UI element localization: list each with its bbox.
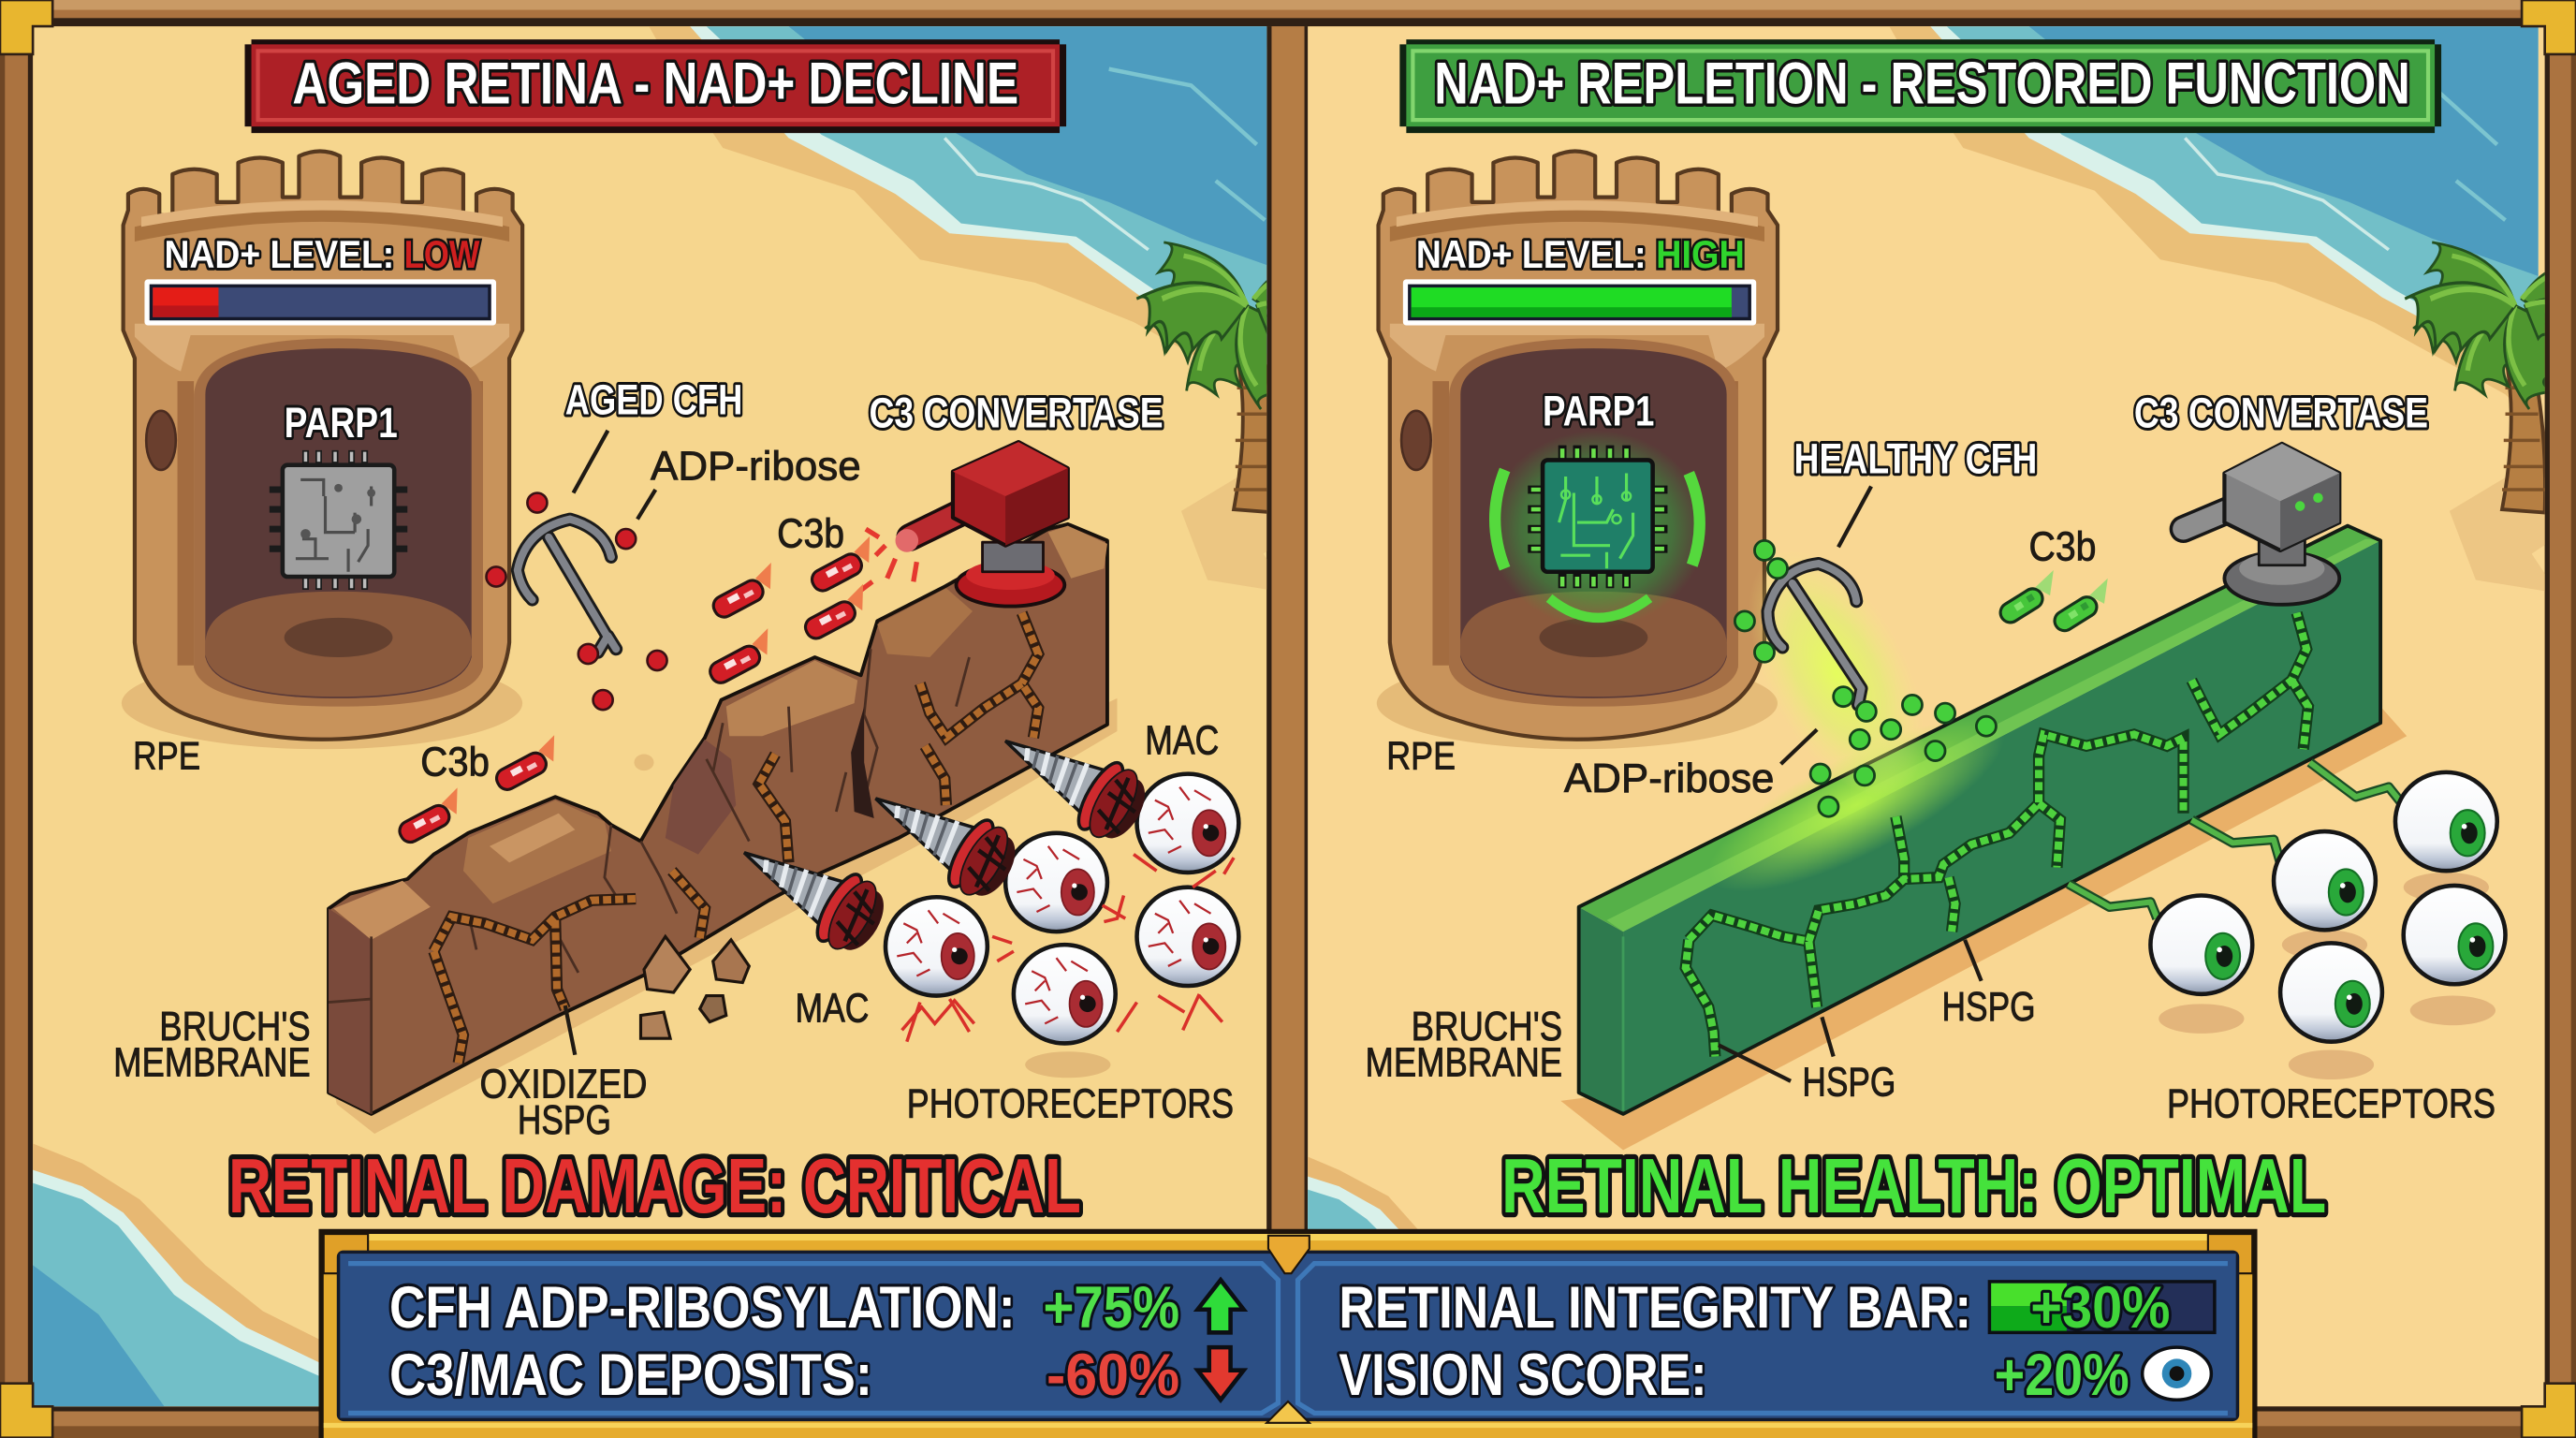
label: aged CFH: AGED CFH xyxy=(565,375,742,423)
value: +30%: +30% xyxy=(2030,1275,2170,1341)
gauge value low: LOW xyxy=(404,232,480,276)
value: +20%: +20% xyxy=(1995,1343,2130,1408)
tower: RPE xyxy=(122,151,522,749)
label: HSPG upper: HSPG xyxy=(1942,984,2036,1030)
stat: retinal integrity bar: RETINAL INTEGRITY BAR: xyxy=(1339,1275,1971,1341)
label: healthy CFH: HEALTHY CFH xyxy=(1794,434,2037,482)
stat: C3/MAC deposits: C3/MAC DEPOSITS: xyxy=(389,1343,872,1408)
label: C3b lower: C3b xyxy=(420,739,490,785)
label: C3 convertase: C3 CONVERTASE xyxy=(869,389,1164,436)
gauge label: NAD+ LEVEL: xyxy=(1416,232,1647,276)
title banner: NAD+ repletion xyxy=(1399,39,2441,133)
panel: NAD+ repletion xyxy=(1308,26,2576,1406)
healthy Bruch's membrane wall xyxy=(1560,526,2407,1151)
tower: RPE right xyxy=(1377,151,1778,749)
C3b projectiles xyxy=(393,536,883,845)
label: MAC right: MAC xyxy=(1145,718,1219,764)
banner text: AGED RETINA - NAD+ DECLINE xyxy=(292,51,1018,117)
status: retinal health: RETINAL HEALTH: OPTIMAL xyxy=(1501,1143,2326,1229)
stat: vision score: VISION SCORE: xyxy=(1339,1343,1707,1408)
label: C3b: C3b xyxy=(2029,523,2097,569)
label: RPE: RPE xyxy=(133,733,200,777)
connecting vines to photoreceptors xyxy=(2069,762,2402,918)
value: -60%: -60% xyxy=(1046,1343,1179,1408)
label: RPE: RPE xyxy=(1386,733,1456,777)
label: photoreceptors: PHOTORECEPTORS xyxy=(907,1080,1234,1126)
beach background right xyxy=(1308,26,2576,1406)
icon: grey PARP1 chip xyxy=(270,450,407,590)
healthy photoreceptors xyxy=(2150,772,2506,1079)
grey C3 convertase turret xyxy=(2184,444,2339,605)
HSPG vines xyxy=(1686,613,2308,1056)
label: C3 convertase: C3 CONVERTASE xyxy=(2134,389,2428,436)
value: +75%: +75% xyxy=(1043,1275,1179,1341)
icon: healthy CFH hook xyxy=(1767,564,1862,705)
icon: eye xyxy=(2143,1347,2211,1400)
center ornament bottom xyxy=(1266,1401,1310,1423)
status: retinal damage: RETINAL DAMAGE: CRITICAL xyxy=(228,1143,1081,1229)
PARP1 label: PARP1 xyxy=(1543,388,1654,435)
beach background left xyxy=(33,26,1369,1406)
gauge value high: HIGH xyxy=(1656,232,1745,276)
ADP-ribose green dots xyxy=(1734,540,1996,816)
stat: CFH ADP-ribosylation: CFH ADP-RIBOSYLATION: xyxy=(389,1275,1016,1341)
rubble rocks xyxy=(640,936,749,1038)
title banner: aged retina xyxy=(245,39,1066,133)
leaders: HSPG lower xyxy=(1719,1017,1834,1081)
CFH glow xyxy=(1713,522,1961,825)
stats HUD xyxy=(318,1229,2258,1438)
panel: aged retina xyxy=(33,26,1369,1406)
center ornament top xyxy=(1268,1236,1310,1273)
label: ADP-ribose: ADP-ribose xyxy=(1564,756,1775,801)
icon: aged CFH grappling hook xyxy=(518,520,616,653)
NAD+ level gauge low xyxy=(144,232,496,325)
C3b projectiles green xyxy=(1995,570,2120,635)
PARP1 label: PARP1 xyxy=(285,399,398,447)
label: oxidized HSPG: OXIDIZED xyxy=(479,1061,648,1107)
leader: ADP-ribose xyxy=(1781,729,1817,764)
gauge label: NAD+ LEVEL: xyxy=(165,232,394,276)
label: Bruch's membrane: MEMBRANE xyxy=(113,1040,311,1086)
ADP-ribose dots xyxy=(487,493,667,710)
label: Bruch's membrane: MEMBRANE xyxy=(1365,1040,1562,1086)
label: Bruch's membrane: BRUCH'S xyxy=(159,1004,311,1049)
label: oxidized HSPG: HSPG xyxy=(518,1097,611,1143)
label: Bruch's membrane: BRUCH'S xyxy=(1412,1004,1562,1049)
icon: glowing PARP1 chip xyxy=(1495,446,1700,618)
label: C3b upper: C3b xyxy=(777,510,844,556)
muzzle sparks xyxy=(859,529,916,592)
leader: healthy CFH xyxy=(1838,486,1871,547)
gauge bar xyxy=(144,279,496,325)
red C3 convertase turret xyxy=(896,442,1068,607)
label: HSPG lower: HSPG xyxy=(1802,1060,1895,1106)
icon: down arrow xyxy=(1197,1347,1244,1400)
label: MAC lower: MAC xyxy=(795,986,869,1032)
leader: oxidized HSPG xyxy=(565,1005,575,1055)
chip glow xyxy=(1488,431,1705,627)
oxidized HSPG chains xyxy=(433,613,1038,1064)
drills and damaged photoreceptors xyxy=(725,709,1238,1078)
label: ADP-ribose: ADP-ribose xyxy=(651,443,861,489)
icon: up arrow xyxy=(1197,1280,1244,1332)
leader: aged CFH xyxy=(574,431,607,493)
leader: HSPG upper xyxy=(1965,940,1982,981)
integrity bar xyxy=(1989,1275,2215,1341)
label: photoreceptors: PHOTORECEPTORS xyxy=(2167,1080,2496,1126)
NAD+ level gauge high xyxy=(1403,232,1756,325)
broken Bruch's membrane wall xyxy=(329,524,1117,1134)
gauge bar xyxy=(1403,279,1756,325)
leader: ADP-ribose xyxy=(637,490,655,520)
